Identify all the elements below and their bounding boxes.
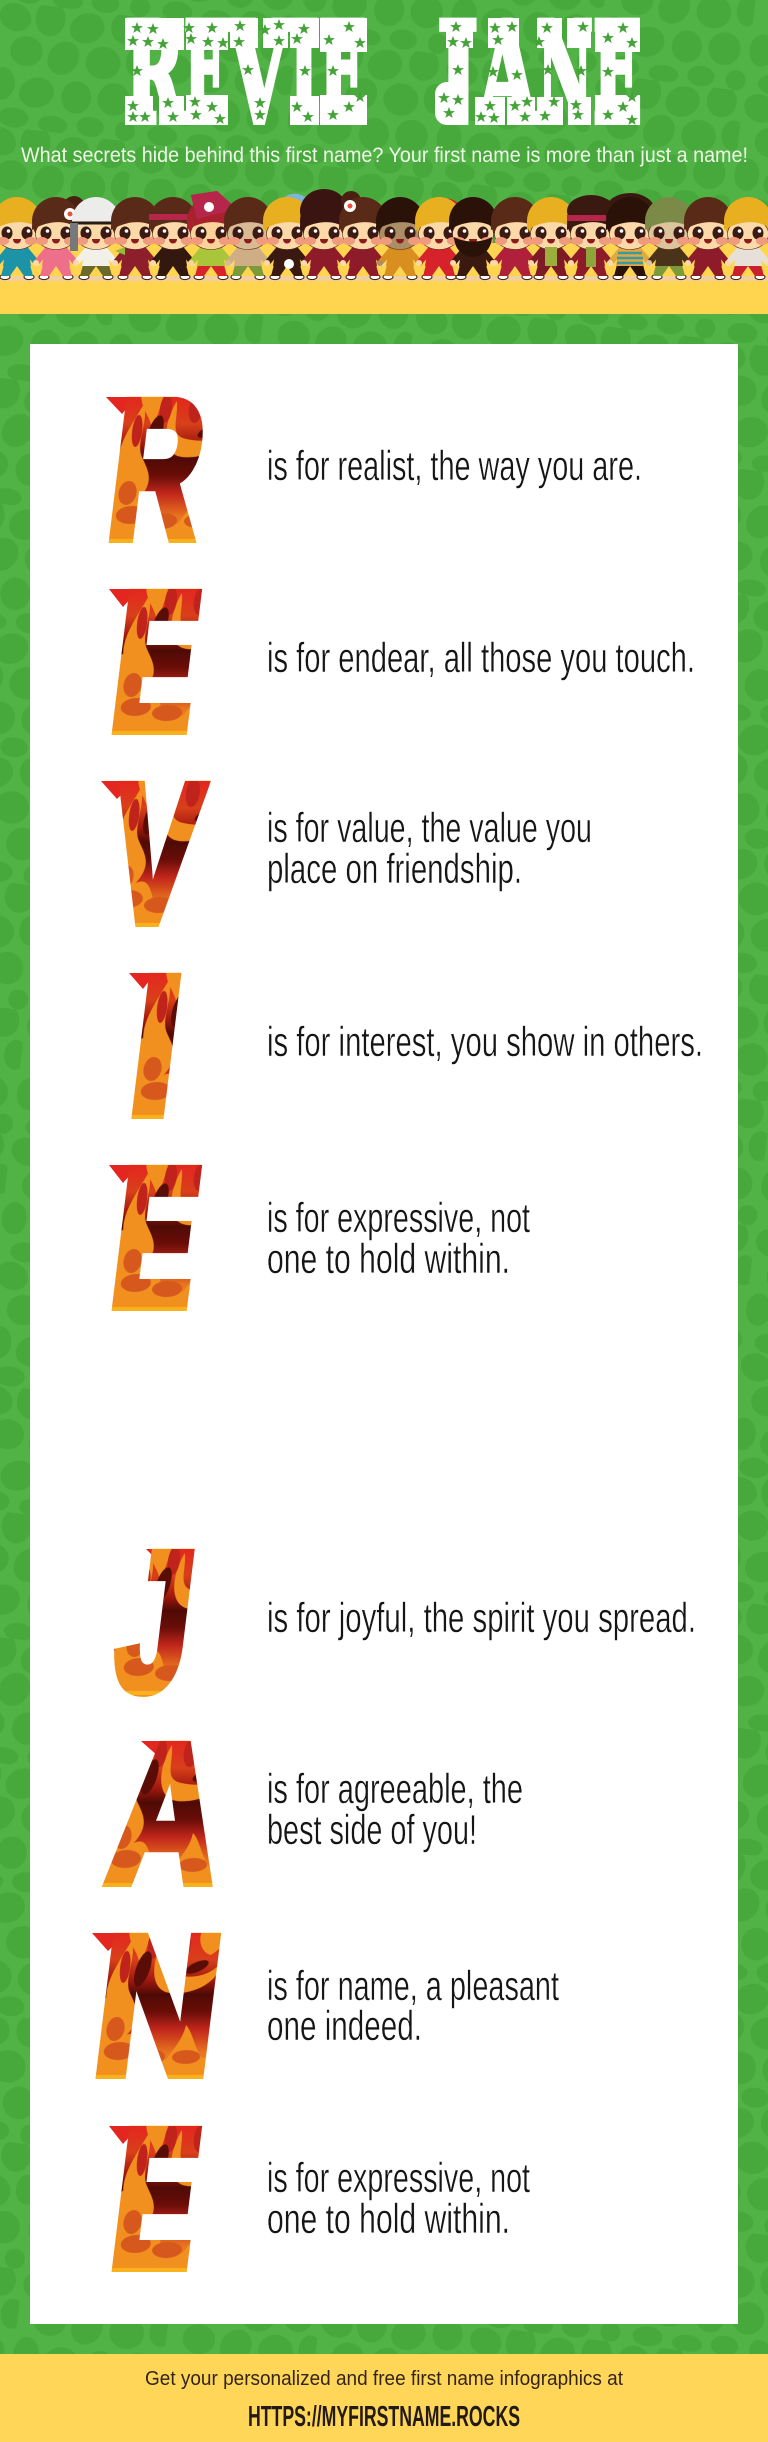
flame letter V: V	[100, 744, 212, 965]
flame letter A: A	[99, 1704, 234, 1925]
flame letter I: I	[120, 936, 193, 1157]
lines for E: one to hold within.	[267, 1235, 510, 1282]
row of characters	[0, 189, 768, 280]
white content panel	[30, 344, 738, 2324]
character 18	[645, 197, 693, 280]
yellow band behind characters	[0, 243, 768, 314]
character 16	[567, 195, 615, 280]
footer text: Get your personalized and free first name infographics at	[145, 2368, 623, 2390]
character 8	[263, 194, 313, 280]
flame letter E: E	[102, 1128, 211, 1349]
character 7	[224, 197, 272, 280]
character 20	[724, 197, 768, 280]
character 9	[300, 189, 348, 280]
character 6	[187, 191, 237, 280]
flame letter E: E	[102, 2089, 211, 2310]
character 17	[605, 193, 655, 280]
lines for A	[267, 1765, 523, 1853]
lines for N: is for name, a pleasant	[267, 1962, 559, 2009]
character 4	[111, 197, 159, 280]
character 15	[527, 197, 575, 280]
lines for E: one to hold within.	[267, 2195, 510, 2242]
flame letter J: J	[106, 1512, 205, 1733]
title	[125, 18, 640, 125]
character 10	[339, 191, 387, 280]
ground strip	[0, 276, 768, 281]
flame letter R: R	[99, 360, 216, 581]
character 12	[415, 197, 463, 280]
footer url: HTTPS://MYFIRSTNAME.ROCKS	[248, 2401, 520, 2433]
lines for E: is for expressive, not	[267, 1194, 530, 1241]
character 14	[491, 197, 539, 280]
lines for N	[267, 1962, 559, 2049]
character 5	[149, 197, 197, 280]
flame letter E	[102, 552, 211, 773]
flame letter R	[99, 360, 216, 581]
lines for E: is for expressive, not	[267, 2154, 530, 2201]
flame letter E: E	[102, 552, 211, 773]
character 3	[70, 197, 120, 280]
flame letter E	[102, 1128, 211, 1349]
lines for A: best side of you!	[267, 1806, 477, 1853]
character 13	[449, 197, 497, 280]
character 19	[684, 197, 732, 280]
lines for V	[267, 804, 592, 892]
lines for V: is for value, the value you	[267, 804, 592, 851]
character 11	[376, 197, 424, 280]
lines for E	[267, 2154, 530, 2242]
flame letter E	[102, 2089, 211, 2310]
flame letter N: N	[84, 1896, 233, 2117]
lines for V: place on friendship.	[267, 845, 522, 892]
lines for N: one indeed.	[267, 2002, 422, 2049]
character 1	[0, 197, 41, 280]
lines for A: is for agreeable, the	[267, 1765, 523, 1812]
lines for E	[267, 1194, 530, 1282]
footer band	[0, 2354, 768, 2442]
character 2	[32, 196, 85, 280]
